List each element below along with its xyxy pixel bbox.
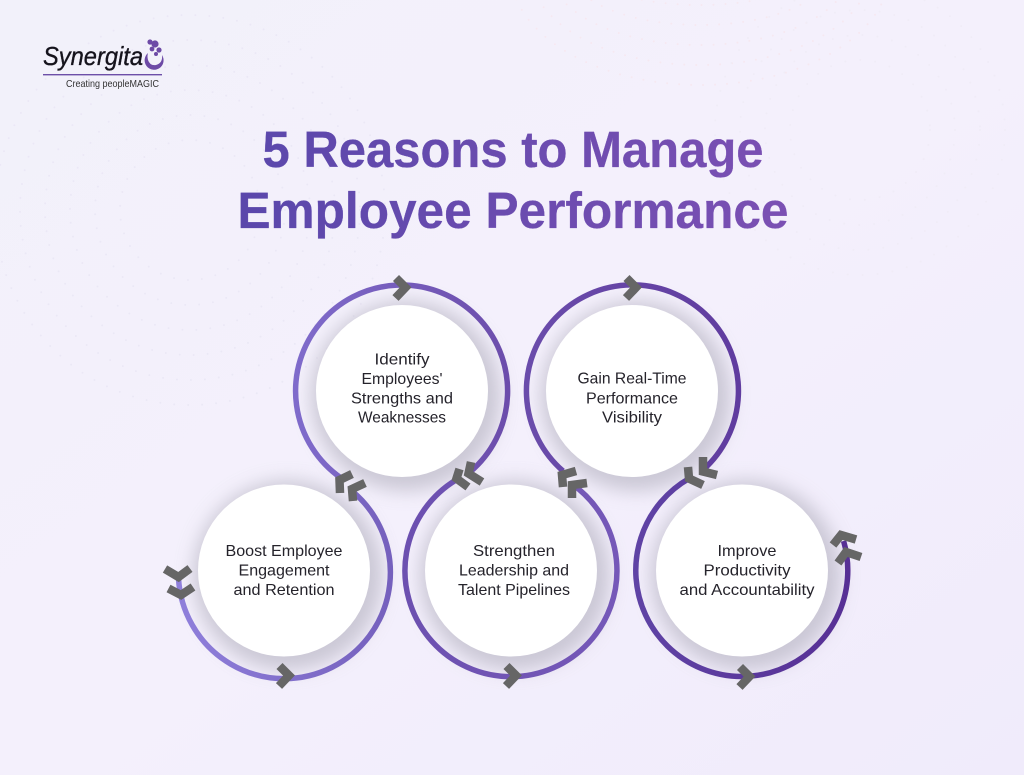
label: Strengths and — [351, 390, 453, 407]
label — [578, 370, 687, 427]
arrow: ring 2 bottom — [279, 666, 289, 686]
arrow: ring 4 top — [626, 278, 636, 298]
label: Improve — [718, 543, 777, 560]
ring — [526, 285, 738, 471]
arrow pair: ring 2 end — [165, 568, 193, 595]
label — [351, 351, 453, 427]
label: Visibility — [602, 410, 662, 427]
title: Employee Performance — [238, 182, 788, 239]
arrow pair: rings 1 and 2 junction — [340, 474, 365, 501]
label: Productivity — [704, 562, 790, 579]
logo: Synergita — [43, 39, 164, 90]
white circle — [316, 305, 488, 477]
label: Employees' — [362, 371, 442, 388]
label: Boost Employee — [226, 543, 343, 560]
white circle — [198, 484, 370, 656]
arrow pair: ring 5 end — [833, 535, 861, 563]
logo wordmark: Synergita — [43, 41, 143, 71]
label: and Accountability — [680, 582, 814, 599]
arrows — [165, 278, 861, 687]
white circle — [656, 484, 828, 656]
label: Gain Real-Time — [578, 370, 687, 387]
ring — [405, 480, 617, 677]
logo icon: swirl — [145, 39, 164, 70]
white circle — [425, 484, 597, 656]
ring — [296, 285, 508, 478]
label — [680, 543, 814, 599]
logo tagline: Creating peopleMAGIC — [66, 78, 159, 90]
label: Performance — [586, 390, 678, 407]
label: Weaknesses — [358, 410, 446, 427]
label: Identify — [374, 351, 430, 368]
label: and Retention — [234, 582, 334, 599]
arrow pair: rings 4 and 5 junction — [688, 457, 717, 485]
title — [238, 121, 788, 239]
logo underline — [43, 74, 162, 75]
arrow: ring 3 bottom — [506, 666, 516, 686]
label: Engagement — [238, 562, 330, 579]
label — [226, 543, 343, 599]
arrow: ring 1 top — [396, 278, 406, 298]
white circle — [546, 305, 718, 477]
panel: Identify Employees' Strengths and Weaknesses — [296, 285, 508, 491]
panel: Improve Productivity and Accountability — [636, 478, 848, 676]
ring — [636, 478, 848, 676]
ring — [178, 491, 390, 679]
label — [458, 543, 570, 599]
panel: Boost Employee Engagement and Retention — [178, 480, 390, 679]
arrow pair: rings 1 and 3 junction — [456, 462, 482, 487]
arrow pair: rings 3 and 4 junction — [562, 471, 587, 498]
label: Leadership and — [459, 562, 569, 579]
label: Talent Pipelines — [458, 582, 570, 599]
panel: Gain Real-Time Performance Visibility — [526, 285, 738, 491]
label: Strengthen — [473, 543, 555, 560]
panel: Strengthen Leadership and Talent Pipelines — [405, 480, 617, 677]
arrow: ring 5 bottom — [740, 667, 750, 687]
title: 5 Reasons to Manage — [262, 121, 764, 178]
